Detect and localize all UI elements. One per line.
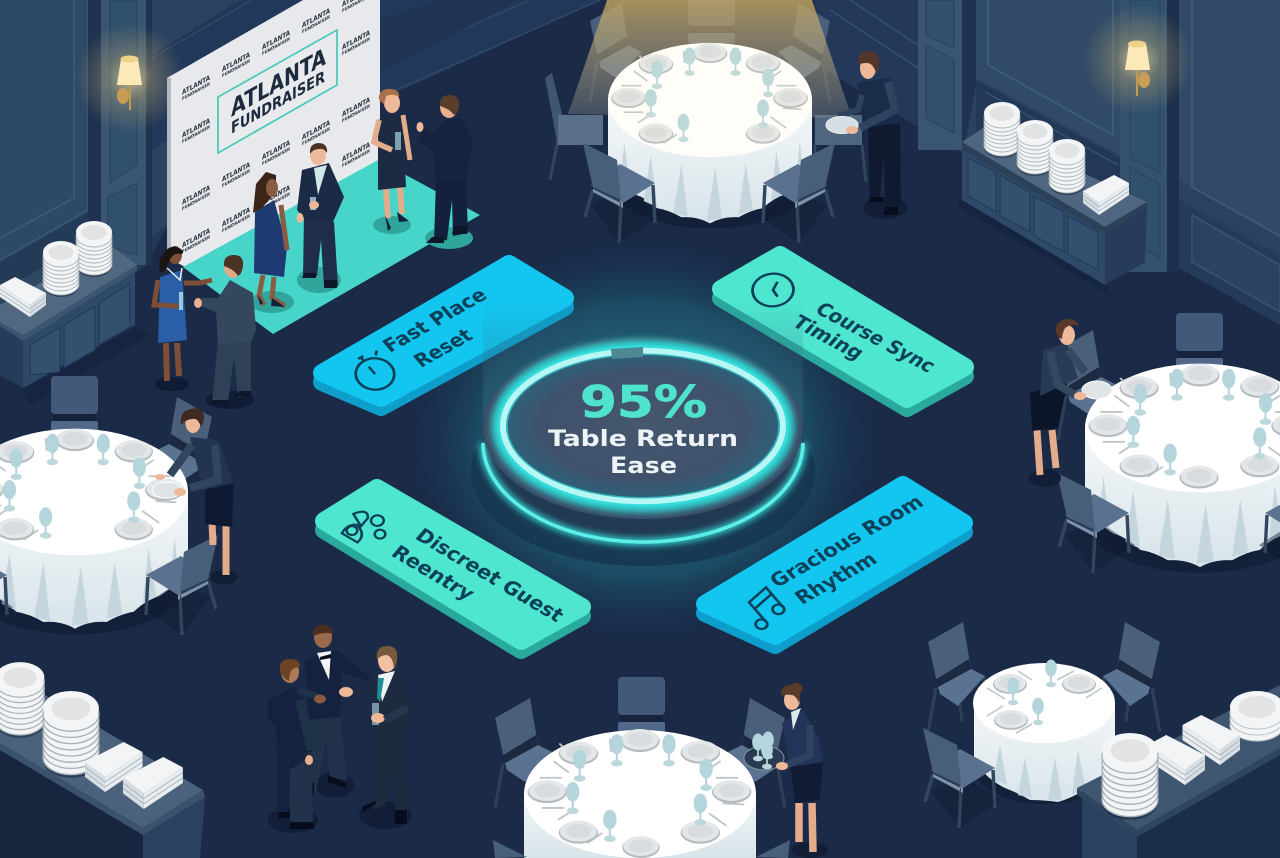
metric card: Gracious Room Rhythm: Rhythm [790, 548, 882, 609]
person: waitress with glass tray at bottom table [744, 683, 828, 858]
sideboard: lower right with plates and napkins [1077, 685, 1280, 858]
backdrop banner: ATLANTA [231, 42, 326, 124]
person: woman in navy dress at backdrop [250, 172, 294, 313]
person: waitress resetting place at right table [1029, 319, 1112, 487]
metric card: Fast Place Reset: Reset [409, 324, 477, 372]
metric card: Course Sync Timing: Timing [788, 311, 869, 364]
icon: music note [737, 587, 790, 631]
progress ring [503, 350, 783, 502]
progress ring glow [500, 348, 786, 504]
metric card: Discreet Guest Reentry: Discreet Guest [411, 524, 569, 626]
remaining segment [611, 347, 643, 359]
icon: guests [338, 505, 395, 551]
disc top [483, 337, 803, 519]
label: Table Return [548, 427, 738, 452]
sideboard: right wall with plates and napkins [955, 102, 1147, 295]
lower glowing ring [483, 443, 803, 542]
person: waiter clearing plate at top table [826, 51, 907, 219]
dining table: bottom with chairs [493, 677, 790, 858]
dining table: left with chairs [0, 376, 218, 635]
label line 2: Ease [610, 454, 677, 479]
metric card: Discreet Guest Reentry [324, 488, 582, 650]
person: man in tuxedo at backdrop [296, 143, 344, 293]
metric card: Gracious Room Rhythm [705, 485, 964, 645]
teal carpet [183, 160, 480, 334]
group of three men in suits [268, 625, 413, 833]
icon: clock [744, 267, 802, 313]
person: blonde woman in dark dress [373, 89, 411, 234]
central glow [393, 230, 893, 650]
backdrop banner: FUNDRAISER [231, 67, 325, 139]
sideboard: left wall with plates and napkins [0, 221, 150, 405]
dining table: top centre with chairs and light cone [545, 0, 866, 243]
value: 95% [580, 377, 707, 428]
disc inner face [508, 355, 778, 497]
dining table: small lower right with chairs [923, 622, 1160, 828]
metric card: Gracious Room Rhythm: Gracious Room [765, 491, 928, 592]
disc base [471, 378, 815, 566]
KPI disc [471, 300, 815, 566]
light column above disc [483, 300, 803, 430]
metric card: Fast Place Reset [322, 264, 565, 407]
right wall [815, 0, 1280, 325]
person: woman in blue dress [154, 246, 212, 391]
metric card: Fast Place Reset: Fast Place [378, 284, 491, 357]
wall sconce right [1083, 5, 1193, 115]
metric card: Course Sync Timing: Course Sync [811, 298, 940, 377]
metric card: Discreet Guest Reentry: Reentry [387, 541, 479, 605]
person: man seen from behind at backdrop [416, 95, 473, 249]
icon: stopwatch [345, 349, 402, 396]
backdrop banner [167, 0, 380, 267]
person: waitress setting place at left table [152, 408, 238, 584]
left wall [0, 0, 600, 352]
person: man in grey suit seen from behind [194, 255, 256, 409]
wall sconce left [75, 23, 185, 133]
metric card: Course Sync Timing [721, 255, 965, 408]
sideboard: lower left with plates and napkins [0, 662, 205, 858]
dining table: right with chairs [1057, 313, 1280, 573]
